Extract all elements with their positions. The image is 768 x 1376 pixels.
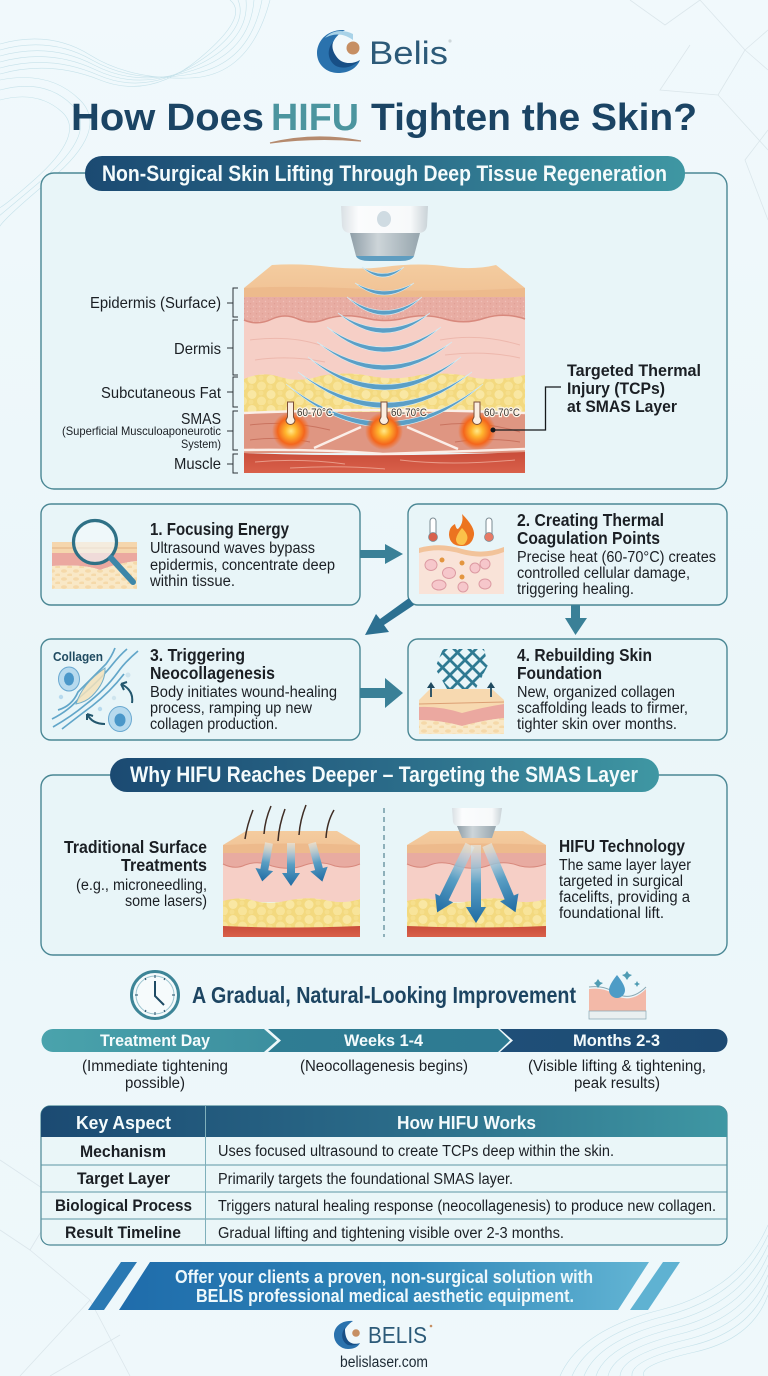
chevron: weeks 1-4: Weeks 1-4 — [344, 1031, 424, 1050]
step text: Body initiates wound-healing — [150, 684, 337, 701]
callout: targeted thermal injury: Injury (TCPs) — [567, 379, 665, 398]
wordmark: BELIS — [368, 1322, 427, 1348]
arrow: step 1 to 2 — [360, 544, 403, 564]
callout: targeted thermal injury: Targeted Thermal — [567, 361, 701, 380]
icon: magnifier over skin — [52, 520, 137, 589]
icon: small wave logo — [334, 1321, 360, 1349]
chevron: months 2-3: Months 2-3 — [573, 1031, 660, 1050]
panel: step 1 — [41, 504, 360, 605]
step text — [150, 645, 337, 733]
chevron: weeks 1-4 — [268, 1029, 510, 1052]
traditional treatments text: Treatments — [121, 855, 207, 875]
layer labels: Epidermis (Surface) — [90, 295, 221, 312]
table header: Key Aspect — [76, 1112, 171, 1133]
step text: tighter skin over months. — [517, 716, 677, 733]
title: HIFU — [271, 97, 359, 139]
step text: Coagulation Points — [517, 528, 660, 548]
row: result timeline — [65, 1223, 564, 1242]
ultrasound waves — [286, 267, 483, 427]
callout: targeted thermal injury — [490, 361, 701, 432]
skin layers diagram — [244, 264, 525, 473]
HIFU technology text: targeted in surgical — [559, 873, 683, 890]
chevron: months 2-3 — [500, 1029, 728, 1052]
timeline notes: possible) — [125, 1075, 185, 1092]
layer labels: SMAS — [181, 411, 221, 428]
heading pill: Non-Surgical Skin Lifting Through Deep Tissue Regeneration — [102, 161, 667, 186]
logo: Belis — [317, 30, 452, 73]
timeline section — [42, 971, 728, 1092]
panel: why HIFU reaches deeper — [41, 758, 727, 955]
timeline notes: (Immediate tightening — [82, 1058, 228, 1075]
heading pill — [110, 758, 659, 792]
call-to-action banner: BELIS professional medical aesthetic equipment. — [196, 1286, 574, 1306]
step text: within tissue. — [149, 573, 235, 590]
HIFU technology text: HIFU Technology — [559, 836, 685, 856]
icon: collagen scaffold over skin — [419, 649, 504, 734]
timeline notes — [82, 1058, 706, 1092]
HIFU technology text: The same layer layer — [559, 857, 691, 874]
arrow: step 2 to 3 — [365, 598, 414, 635]
title — [71, 97, 697, 143]
step text: process, ramping up new — [150, 700, 313, 717]
step text — [517, 645, 688, 733]
timeline notes: (Neocollagenesis begins) — [300, 1058, 468, 1075]
table header: How HIFU Works — [397, 1112, 536, 1133]
call-to-action banner — [88, 1262, 680, 1310]
table: key aspects — [41, 1106, 727, 1245]
step text: 4. Rebuilding Skin — [517, 645, 652, 665]
timeline notes: (Visible lifting & tightening, — [528, 1058, 706, 1075]
skin diagram: traditional — [223, 805, 360, 937]
row: result timeline: Gradual lifting and tightening visible over 2-3 months. — [218, 1225, 564, 1242]
step text — [149, 519, 335, 590]
icon: collagen and cells: Collagen — [53, 649, 103, 664]
step text: controlled cellular damage, — [517, 565, 690, 582]
thermal coagulation points: 60-70°C — [297, 407, 333, 419]
row: target layer: Target Layer — [77, 1169, 170, 1188]
traditional treatments text — [64, 837, 207, 910]
arrow: step 3 to 4 — [360, 678, 403, 708]
row: biological process: Biological Process — [55, 1196, 192, 1215]
row: mechanism: Mechanism — [80, 1142, 166, 1161]
HIFU technology text: facelifts, providing a — [559, 889, 690, 906]
panel: step 4 — [408, 639, 727, 740]
row: mechanism — [80, 1142, 614, 1161]
icon: collagen and cells — [52, 648, 138, 732]
row: target layer: Primarily targets the foundational SMAS layer. — [218, 1171, 513, 1188]
layer labels — [62, 295, 222, 473]
table header — [41, 1106, 727, 1137]
thermal coagulation points: 60-70°C — [484, 407, 520, 419]
layer labels: Dermis — [174, 341, 221, 358]
layer labels: (Superficial Musculoaponeurotic — [62, 424, 221, 438]
step text: epidermis, concentrate deep — [150, 557, 335, 574]
row: target layer — [77, 1169, 513, 1188]
step text: Neocollagenesis — [150, 663, 275, 683]
wordmark: Belis — [369, 35, 448, 71]
thermal coagulation points — [272, 402, 520, 450]
row: result timeline: Result Timeline — [65, 1223, 181, 1242]
step text: 1. Focusing Energy — [150, 519, 289, 539]
step text: collagen production. — [150, 716, 278, 733]
icon: ultrasound transducer — [341, 206, 428, 261]
icon: clock — [132, 972, 178, 1018]
layer labels: Subcutaneous Fat — [101, 385, 222, 402]
traditional treatments text: (e.g., microneedling, — [76, 877, 207, 894]
title: Tighten the Skin? — [371, 97, 697, 139]
callout: targeted thermal injury: at SMAS Layer — [567, 397, 677, 416]
footer logo — [334, 1321, 432, 1371]
step text: New, organized collagen — [517, 684, 675, 701]
thermal coagulation points: 60-70°C — [391, 407, 427, 419]
timeline notes: peak results) — [574, 1075, 660, 1092]
step text — [517, 510, 716, 598]
skin diagram: HIFU — [407, 808, 546, 937]
panel: skin cross-section — [41, 156, 727, 489]
step text: 2. Creating Thermal — [517, 510, 664, 530]
step text: Ultrasound waves bypass — [150, 540, 315, 557]
step text: triggering healing. — [517, 581, 634, 598]
comparison divider — [383, 808, 385, 937]
layer labels: System) — [181, 437, 221, 451]
step text: scaffolding leads to firmer, — [517, 700, 688, 717]
layer labels: Muscle — [174, 456, 221, 473]
HIFU technology text: foundational lift. — [559, 905, 664, 922]
step text: Foundation — [517, 663, 602, 683]
HIFU technology text — [559, 836, 691, 922]
chevron: treatment day: Treatment Day — [100, 1031, 210, 1050]
row: biological process — [55, 1196, 716, 1215]
traditional treatments text: Traditional Surface — [64, 837, 207, 857]
title: How Does — [71, 97, 264, 139]
row: mechanism: Uses focused ultrasound to create TCPs deep within the skin. — [218, 1143, 614, 1160]
heading pill — [85, 156, 685, 191]
icon: heat and cells — [419, 514, 504, 594]
icon: hydrated skin — [589, 971, 646, 1019]
layer brackets — [227, 288, 238, 473]
step text: Precise heat (60-70°C) creates — [517, 549, 716, 566]
timeline heading: A Gradual, Natural-Looking Improvement — [192, 982, 576, 1008]
traditional treatments text: some lasers) — [125, 893, 207, 910]
website: belislaser.com — [340, 1354, 428, 1371]
icon: wave logo — [317, 30, 360, 73]
step text: 3. Triggering — [150, 645, 245, 665]
row: biological process: Triggers natural healing response (neocollagenesis) to produce new collagen. — [218, 1198, 716, 1215]
arrow: step 2 to 4 — [565, 605, 587, 635]
heading pill: Why HIFU Reaches Deeper – Targeting the SMAS Layer — [130, 762, 638, 787]
panel: step 2 — [408, 504, 727, 605]
panel: step 3 — [41, 639, 360, 740]
call-to-action banner: Offer your clients a proven, non-surgical solution with — [175, 1267, 593, 1287]
chevron: treatment day — [42, 1029, 277, 1052]
